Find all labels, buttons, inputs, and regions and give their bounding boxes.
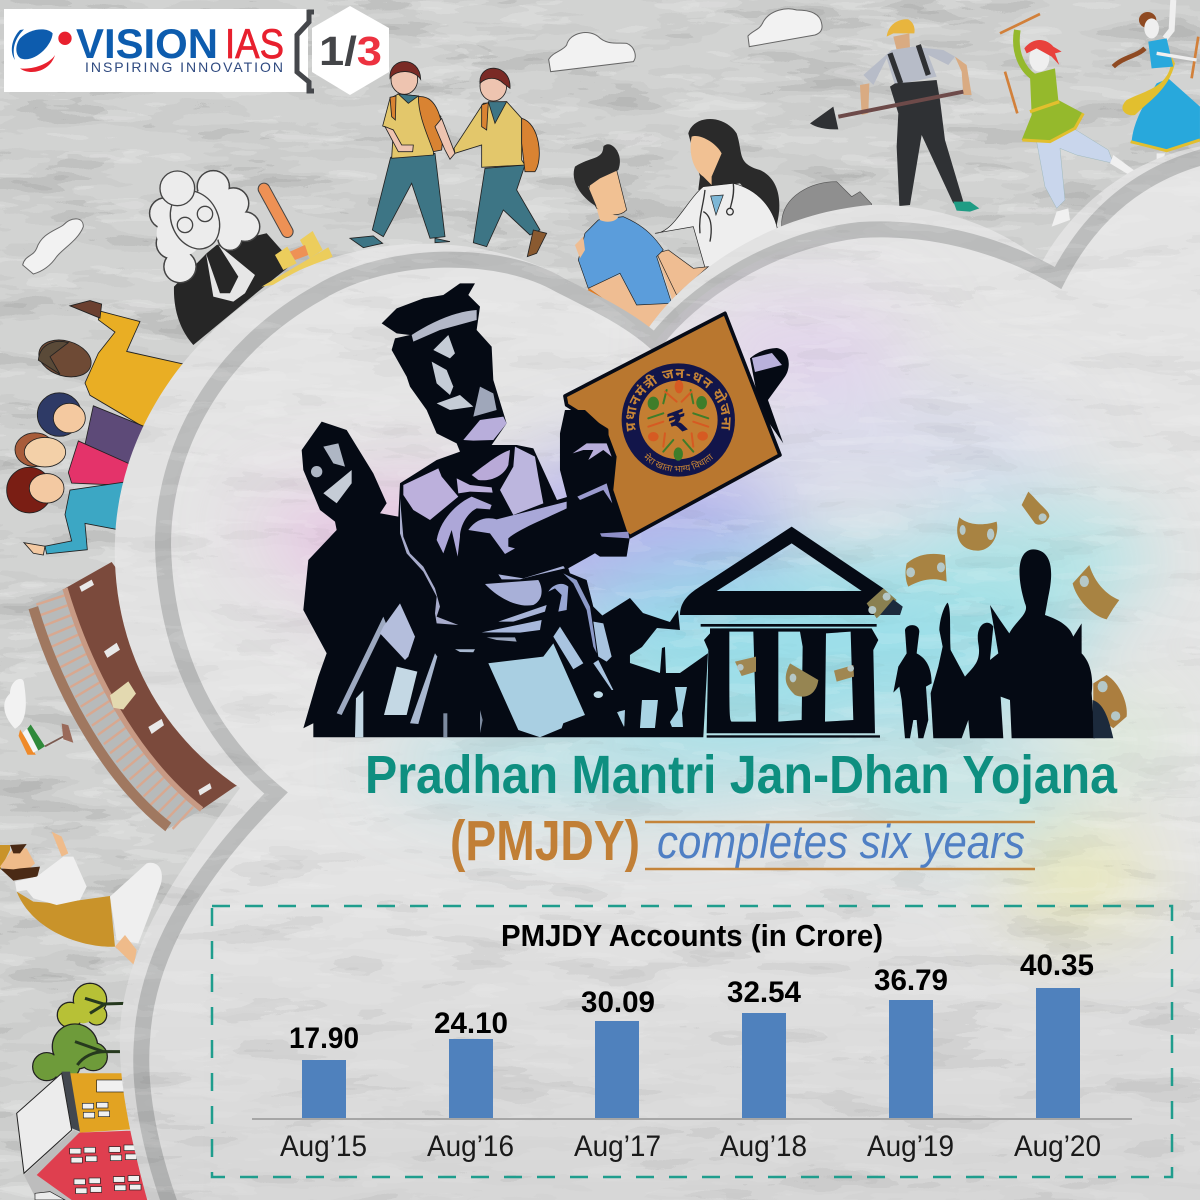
hexagon badge (312, 6, 389, 95)
emblem circle: ₹ (663, 403, 694, 442)
category labels: Aug’16 (427, 1130, 514, 1163)
logo wordmark IAS: IAS (225, 20, 284, 67)
part number: 1/3 (319, 28, 382, 74)
figure: construction worker with shovel (782, 19, 979, 233)
figure: parliament building with flag (4, 562, 267, 829)
value labels: 36.79 (874, 964, 948, 997)
figure: group of four people (7, 301, 213, 555)
value labels (289, 949, 1094, 1055)
cloud surface texture (120, 148, 1200, 1200)
illustration: crowd silhouette (893, 549, 1095, 738)
emblem circle: प्रधानमंत्री जन-धन योजना (626, 369, 731, 432)
value labels: 40.35 (1020, 949, 1094, 982)
bars (302, 988, 1080, 1118)
value labels: 30.09 (581, 986, 655, 1019)
figure: dandiya dancers (1000, 0, 1200, 227)
bar chart: PMJDY accounts (212, 906, 1172, 1177)
category labels: Aug’17 (574, 1130, 661, 1163)
logo tagline: INSPIRING INNOVATION (85, 59, 283, 75)
emblem circle: मेरा खाता भाग्य विधाता (644, 452, 713, 472)
category labels (280, 1130, 1101, 1163)
illustration: book with PMJDY emblem (563, 311, 789, 538)
icon: small cloud top right (748, 9, 822, 47)
category labels: Aug’20 (1014, 1130, 1101, 1163)
figure: two school children walking (350, 62, 547, 257)
value labels: 32.54 (727, 976, 801, 1009)
value labels: 24.10 (434, 1007, 508, 1040)
subtitle: completes six years: completes six years (657, 815, 1025, 868)
panel: central cloud with ring (115, 145, 1200, 1200)
illustration: bank building (680, 527, 903, 738)
logo: Vision IAS (4, 6, 389, 95)
figure: trees and house (17, 983, 157, 1200)
illustration: torso highlights (380, 443, 629, 737)
category labels: Aug’18 (720, 1130, 807, 1163)
bracket (297, 12, 314, 91)
emblem circle (622, 363, 735, 477)
figure: judge with gavel (150, 171, 333, 345)
figure: sage reclining (0, 832, 162, 965)
figure: doctor and patient (574, 119, 779, 332)
illustration: man and woman silhouette (302, 283, 708, 737)
far hand behind the book (750, 348, 789, 443)
head and woman highlights (311, 310, 687, 737)
illustration: flying banknotes (735, 492, 1127, 738)
category labels: Aug’15 (280, 1130, 367, 1163)
logo wordmark: VISION (76, 20, 218, 67)
subtitle: PMJDY: (PMJDY) (450, 809, 640, 873)
watercolour wash (250, 300, 1170, 930)
icon: logo globe (12, 29, 72, 72)
category labels: Aug’19 (867, 1130, 954, 1163)
silhouette body (302, 283, 708, 737)
icon: small cloud top centre (549, 33, 635, 72)
title: Pradhan Mantri Jan-Dhan Yojana (365, 745, 1118, 805)
icon: small cloud left (23, 219, 83, 274)
chart title: PMJDY Accounts (in Crore) (501, 918, 883, 953)
value labels: 17.90 (289, 1022, 359, 1055)
